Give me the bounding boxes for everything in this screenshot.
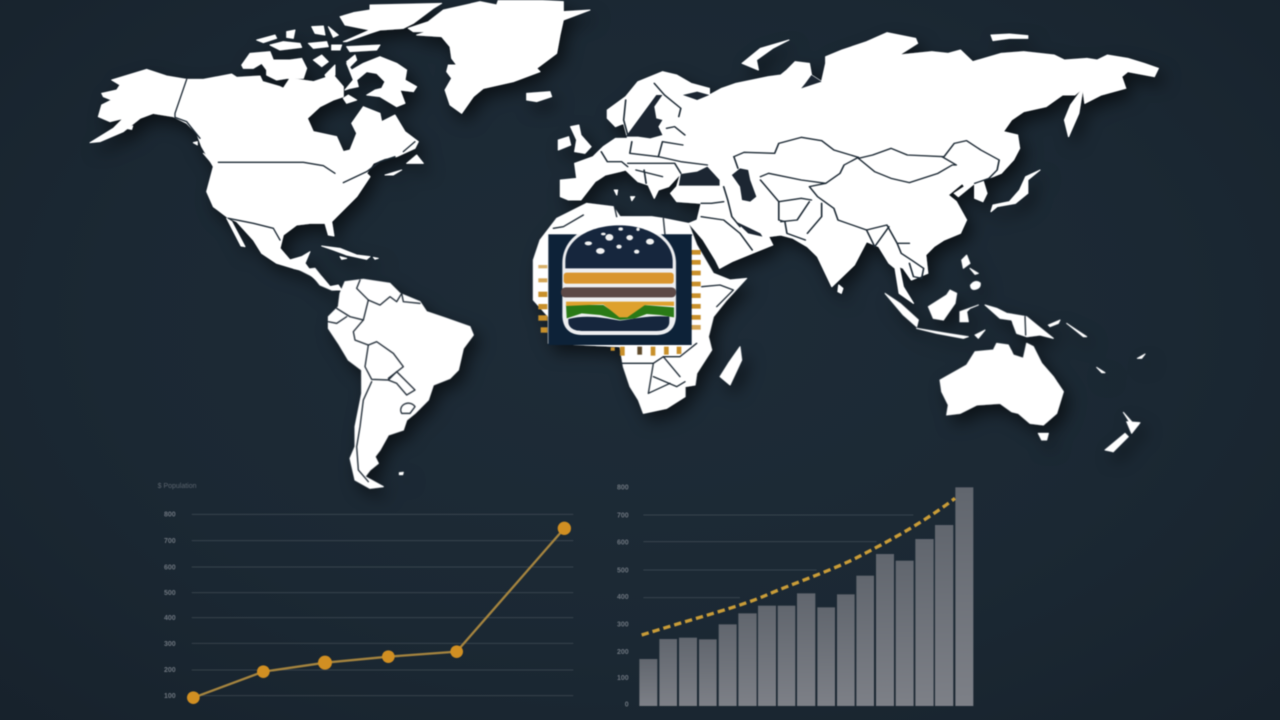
bar chart axis labels: 800 — [617, 484, 629, 491]
line chart axis labels: 100 — [164, 693, 176, 700]
line markers — [187, 522, 571, 704]
Java — [917, 328, 968, 338]
Baja California — [227, 218, 245, 247]
top bun — [565, 225, 673, 268]
map: Southeast Asia and Oceania — [885, 255, 1145, 452]
bar chart axis labels: 400 — [617, 594, 629, 601]
bottom bun — [568, 316, 669, 331]
bar chart axis labels — [617, 484, 629, 709]
chart: bar chart — [617, 484, 973, 709]
cheese band — [564, 273, 674, 284]
chip body — [548, 234, 692, 345]
Borneo — [928, 290, 957, 320]
Arctic island group — [991, 34, 1028, 41]
Australia — [940, 343, 1063, 425]
line chart axis labels: 500 — [164, 590, 176, 597]
Philippines and small islands — [962, 255, 1145, 373]
map: Africa — [533, 202, 747, 413]
Novaya Zemlya — [742, 40, 789, 70]
line series — [193, 528, 564, 698]
dashed trend line — [642, 498, 955, 635]
cheese drip — [566, 302, 674, 317]
bar chart axis labels: 500 — [617, 567, 629, 574]
Britain and Ireland — [558, 125, 591, 153]
bar chart grid — [643, 515, 913, 598]
South America borders — [328, 280, 420, 482]
line chart axis labels: 700 — [164, 538, 176, 545]
line chart axis labels: 200 — [164, 667, 176, 674]
North America borders — [175, 79, 415, 240]
inland seas — [626, 75, 822, 237]
Sulawesi — [960, 305, 978, 322]
bar chart axis labels: 300 — [617, 621, 629, 628]
bar chart axis labels: 600 — [617, 540, 629, 547]
world map — [90, 0, 1158, 488]
chip pins — [538, 250, 701, 356]
Madagascar — [720, 347, 742, 385]
burger chip icon — [538, 222, 701, 356]
Newfoundland and Vancouver — [127, 126, 423, 175]
line chart axis labels: 800 — [164, 512, 176, 519]
Greenland — [408, 0, 590, 113]
line chart axis labels: 400 — [164, 615, 176, 622]
Central America link — [300, 268, 340, 290]
New Guinea — [985, 305, 1053, 338]
map: Eurasia — [558, 33, 1158, 303]
Sakhalin — [1064, 88, 1083, 137]
Japan — [991, 170, 1040, 212]
Eurasia borders — [601, 83, 999, 278]
Africa borders — [553, 202, 733, 393]
sesame seeds — [585, 227, 654, 254]
Eurasia landmass — [560, 33, 1158, 303]
bar chart axis labels: 200 — [617, 649, 629, 656]
New Guinea border — [1023, 317, 1028, 335]
bar chart axis labels: 700 — [617, 512, 629, 519]
Falkland Islands — [399, 472, 403, 475]
South America landmass — [328, 279, 473, 488]
bar chart axis labels: 100 — [617, 675, 629, 682]
bar chart axis labels: 0 — [625, 702, 629, 709]
line chart axis labels: 600 — [164, 564, 176, 571]
Sumatra — [885, 293, 918, 327]
Arctic islands — [242, 3, 442, 107]
patty — [561, 287, 676, 297]
chart: line chart — [158, 483, 573, 704]
North America landmass — [90, 69, 418, 290]
map: North America and Greenland — [90, 0, 590, 290]
Africa landmass — [533, 203, 747, 413]
Caribbean islands — [322, 246, 378, 259]
line chart grid — [192, 514, 573, 696]
Iceland — [527, 92, 552, 102]
lettuce layer — [566, 305, 674, 320]
Tasmania — [1038, 433, 1048, 440]
line chart axis labels: 300 — [164, 641, 176, 648]
New Zealand — [1105, 412, 1140, 452]
line chart axis labels — [164, 512, 176, 700]
bars — [639, 487, 973, 706]
Mediterranean islands — [614, 190, 635, 201]
line chart title: $ Population — [158, 483, 197, 490]
Sri Lanka — [838, 285, 843, 293]
burger outline — [562, 222, 676, 335]
map: South America — [300, 268, 473, 488]
